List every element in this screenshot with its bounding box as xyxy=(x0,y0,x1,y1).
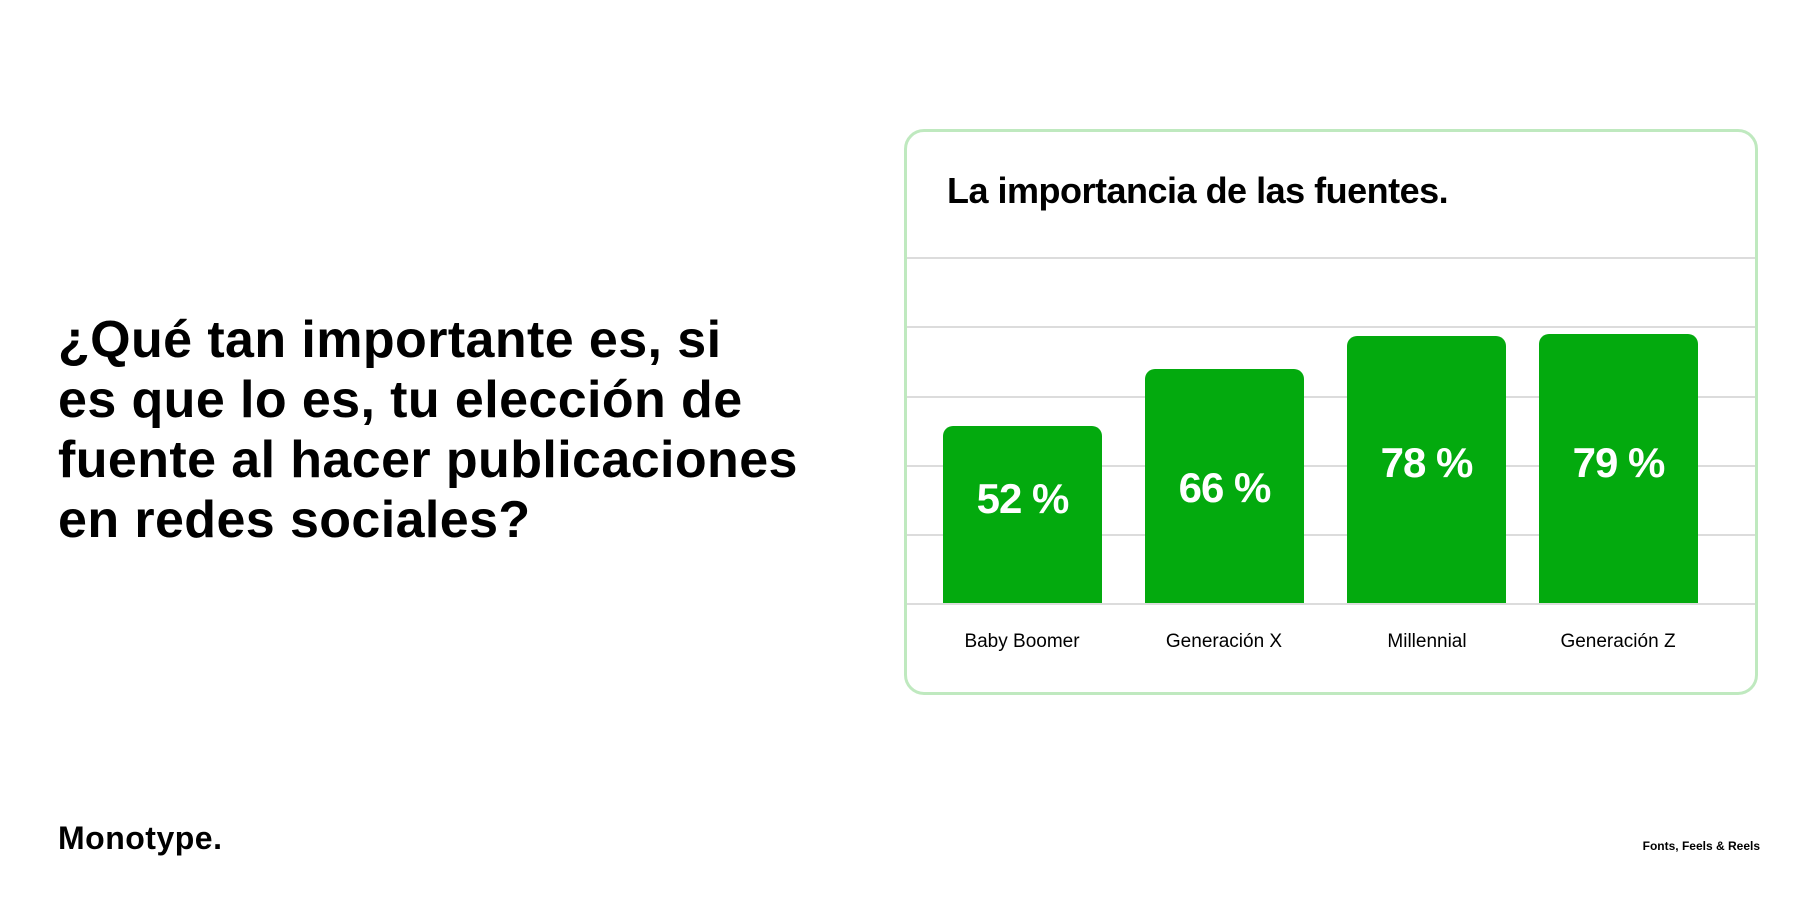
value 66: 66 % xyxy=(1179,464,1270,511)
category labels: Generación X xyxy=(1166,631,1282,652)
heading: ¿Qué tan importante es, si xyxy=(58,311,721,369)
heading: fuente al hacer publicaciones xyxy=(58,431,798,489)
bar: Millennial xyxy=(1347,336,1506,604)
value 52: 52 % xyxy=(977,475,1068,522)
footer text: Fonts, Feels & Reels xyxy=(1643,839,1760,853)
value 79: 79 % xyxy=(1573,439,1664,486)
bar: Baby Boomer xyxy=(943,426,1102,604)
category labels: Millennial xyxy=(1387,631,1467,652)
category labels: Baby Boomer xyxy=(964,631,1080,652)
bar: Generación Z xyxy=(1539,334,1698,604)
logo: Monotype. xyxy=(58,820,222,856)
value 78: 78 % xyxy=(1381,439,1472,486)
chart title: La importancia de las fuentes. xyxy=(947,170,1448,211)
heading: en redes sociales? xyxy=(58,491,531,549)
panel: chart xyxy=(904,129,1758,695)
heading: es que lo es, tu elección de xyxy=(58,371,743,429)
bar: Generación X xyxy=(1145,369,1304,604)
category labels xyxy=(964,631,1676,652)
heading xyxy=(58,311,798,549)
category labels: Generación Z xyxy=(1560,631,1676,652)
